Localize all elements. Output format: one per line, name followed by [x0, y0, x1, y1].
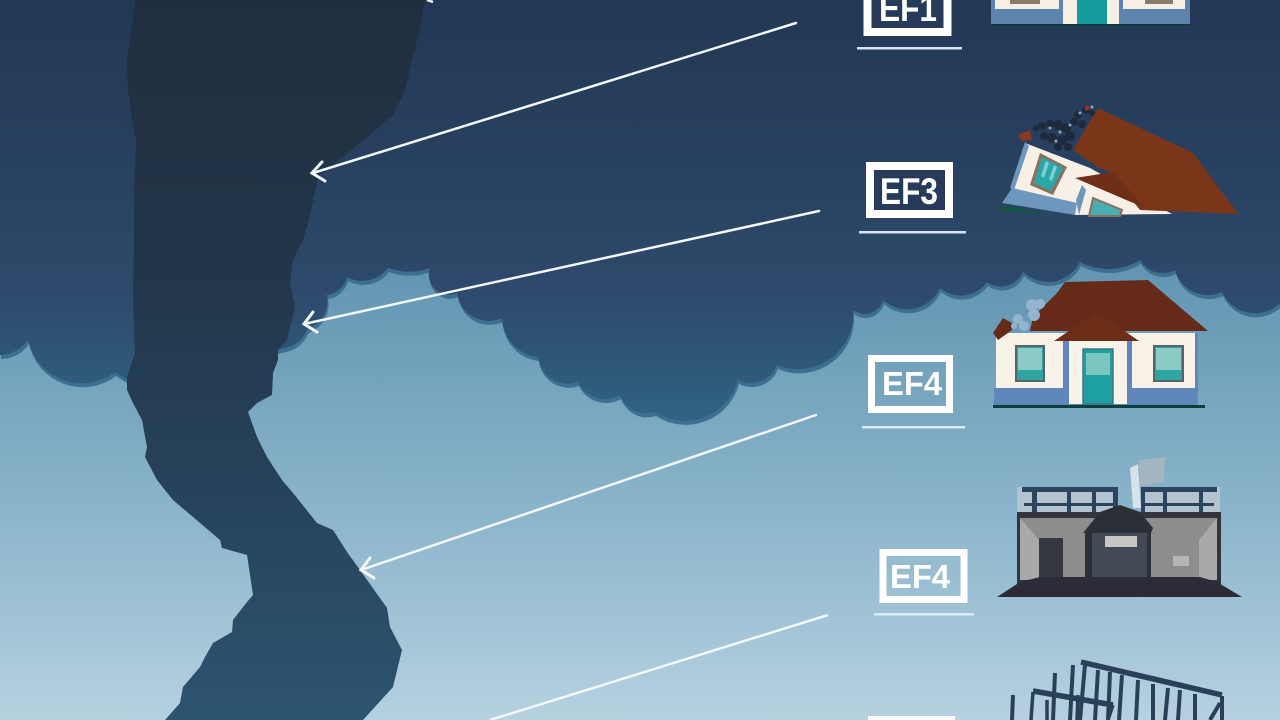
main roof: [1073, 108, 1238, 214]
base: [1002, 188, 1077, 215]
icon: wooden frame: [1012, 662, 1222, 720]
center bay: [1069, 340, 1127, 404]
label: EF4 upper: EF4: [882, 365, 943, 402]
window: [1030, 153, 1067, 195]
walls: [996, 333, 1196, 389]
ground: [993, 405, 1205, 408]
arrow: top, cropped: [427, 0, 433, 2]
label: EF4 upper: [862, 358, 965, 428]
arrow: bottom label to funnel: [490, 615, 828, 720]
broken roof debris: [1011, 299, 1045, 331]
debris: [1033, 106, 1095, 151]
wall: [1012, 143, 1172, 215]
windows: [1016, 346, 1044, 381]
railing panel: [1017, 487, 1117, 515]
small window: [1173, 556, 1189, 566]
debris: [1139, 457, 1165, 486]
walls: [1017, 512, 1221, 584]
front gable: [1054, 312, 1139, 341]
icon: house with roof damage, EF4: [993, 280, 1208, 408]
label: EF3: EF3: [880, 171, 938, 212]
railing: [1022, 487, 1217, 515]
icon: stripped building: [997, 457, 1242, 597]
label: EF1: [857, 0, 962, 50]
icon: damaged tilted house, EF3: [999, 106, 1238, 216]
icon: house top, EF1: [991, 0, 1190, 26]
door: [1083, 349, 1113, 404]
door: [1039, 538, 1063, 579]
label: EF3: [859, 166, 966, 234]
arrow: EF4 to funnel: [361, 415, 816, 578]
arrow: EF3 to funnel: [304, 211, 819, 332]
arrow: EF1 to funnel: [312, 23, 796, 181]
central entrance: [1083, 505, 1153, 578]
storm clouds: [0, 0, 1280, 425]
label: EF4 lower: [874, 552, 974, 616]
front gable: [1075, 172, 1145, 208]
roof: [1030, 280, 1208, 331]
tornado funnel: [127, 0, 425, 720]
label: bottom, cropped: [868, 716, 955, 720]
floor slab: [997, 577, 1242, 597]
label: EF4 lower: EF4: [890, 558, 951, 595]
